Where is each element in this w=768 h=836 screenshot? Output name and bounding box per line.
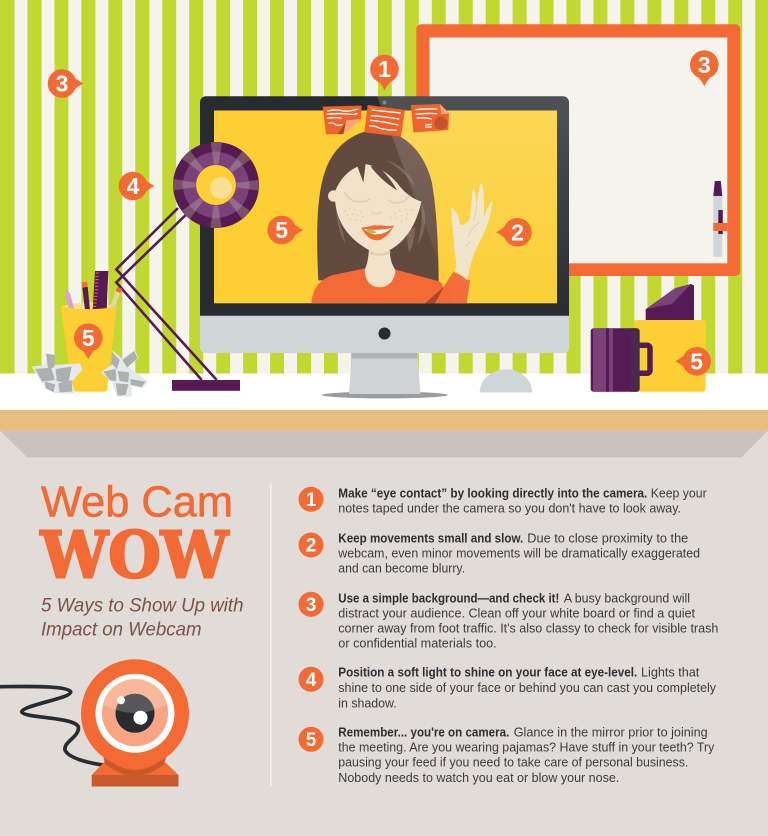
tip 5 text bbox=[338, 725, 715, 785]
tip 4 text: shine to one side of your face or behind you can cast you completely bbox=[338, 680, 717, 695]
tip 3 text: Use a simple background—and check it! bbox=[338, 590, 559, 605]
callout pin 5 on cup: 5 bbox=[82, 325, 95, 351]
tip 5 text: Nobody needs to watch you eat or blow your nose. bbox=[338, 770, 619, 785]
monitor bbox=[200, 96, 569, 353]
subtitle: Impact on Webcam bbox=[41, 620, 202, 641]
callout pin 3 on whiteboard bbox=[690, 50, 719, 86]
number badge 4 bbox=[298, 667, 324, 692]
raised arm sleeve bbox=[433, 272, 470, 303]
computer mouse bbox=[480, 369, 532, 392]
tip 5 text: the meeting. Are you wearing pajamas? Have stuff in your teeth? Try bbox=[338, 740, 715, 755]
number badge 3 bbox=[298, 592, 324, 617]
webcam body bbox=[81, 659, 189, 767]
number badge 1: 1 bbox=[306, 490, 317, 511]
callout pin 5 on folder: 5 bbox=[690, 348, 703, 374]
tip 4 text: Lights that bbox=[641, 665, 700, 680]
tip 5 text: Remember... you're on camera. bbox=[338, 725, 509, 740]
tip 4 text bbox=[338, 665, 717, 710]
sticky notes bbox=[323, 104, 449, 137]
divider bbox=[270, 483, 272, 786]
sticky note left bbox=[323, 106, 362, 134]
tip 4 text: Position a soft light to shine on your face at eye-level. bbox=[338, 665, 637, 680]
tip 1 text bbox=[338, 485, 707, 516]
callout pin 3 on wall: 3 bbox=[56, 71, 68, 97]
nose bbox=[372, 212, 382, 214]
diagonal screen reflection bbox=[377, 96, 569, 268]
tip 2 bbox=[298, 530, 700, 576]
callout pin 2 at hand bbox=[496, 218, 532, 247]
crumpled paper right bbox=[101, 350, 148, 397]
monitor stand bbox=[322, 353, 448, 398]
callout pin 3 on whiteboard: 3 bbox=[698, 52, 711, 78]
marker on whiteboard bbox=[713, 181, 727, 257]
webcam lens bbox=[116, 694, 154, 733]
webcam cable bbox=[0, 686, 103, 765]
tip 5 bbox=[298, 725, 715, 785]
sticky note right bbox=[411, 104, 449, 132]
tip 3 bbox=[298, 590, 718, 651]
face bbox=[335, 164, 421, 252]
webcam stand bbox=[92, 760, 178, 775]
tip 2 text: Keep movements small and slow. bbox=[338, 530, 523, 545]
striped wallpaper bbox=[0, 0, 768, 374]
tip 3 text: A busy background will bbox=[564, 590, 690, 605]
pencils and ruler bbox=[65, 271, 123, 310]
number badge 3: 3 bbox=[306, 595, 316, 616]
callout pin 1 at camera: 1 bbox=[378, 56, 391, 82]
number badge 5: 5 bbox=[306, 730, 317, 751]
lamp head bbox=[173, 142, 259, 228]
tip 3 text: corner away from foot traffic. It's also classy to check for visible trash bbox=[338, 621, 718, 636]
screen bbox=[214, 110, 557, 303]
whiteboard bbox=[416, 24, 740, 276]
hair side strands bbox=[336, 203, 425, 252]
subtitle: 5 Ways to Show Up with bbox=[41, 596, 244, 617]
closed eyes bbox=[345, 193, 409, 203]
number badge 2: 2 bbox=[306, 536, 316, 557]
woman on screen bbox=[311, 130, 493, 303]
title line: WOW: WOW bbox=[40, 518, 230, 593]
callout pin 4 on lamp: 4 bbox=[127, 173, 140, 199]
desk bbox=[0, 374, 768, 457]
lamp base bbox=[172, 380, 240, 391]
number badge 1 bbox=[298, 487, 324, 512]
callout pin 5 on cup bbox=[74, 323, 103, 359]
chin shading bbox=[369, 250, 390, 256]
tip 1 bbox=[298, 485, 707, 516]
callout pin 2 at hand: 2 bbox=[511, 220, 524, 246]
yellow folder bbox=[634, 320, 706, 392]
tip 5 text: pausing your feed if you need to take care of personal business. bbox=[338, 755, 688, 770]
number badge 4: 4 bbox=[306, 670, 317, 691]
icon: webcam bbox=[0, 659, 189, 786]
callout pin 1 at camera bbox=[370, 55, 399, 90]
webcam lens on monitor bbox=[382, 100, 386, 104]
freckles bbox=[344, 207, 413, 222]
mouth with spinach in teeth bbox=[361, 225, 394, 240]
tip 3 text: distract your audience. Clean off your white board or find a quiet bbox=[338, 605, 695, 620]
lamp arms bbox=[116, 208, 217, 380]
tip 2 text: and can become blurry. bbox=[338, 561, 465, 576]
title bbox=[40, 478, 233, 593]
tip 1 text: notes taped under the camera so you don't have to look away. bbox=[338, 501, 681, 516]
lower text panel background bbox=[0, 431, 768, 836]
cup body bbox=[61, 307, 117, 392]
desk lamp bbox=[116, 142, 259, 391]
tip 4 text: in shadow. bbox=[338, 695, 397, 710]
number badge 5 bbox=[298, 727, 324, 752]
pencil cup bbox=[61, 271, 123, 392]
tip 3 text bbox=[338, 590, 718, 651]
shirt bbox=[311, 268, 443, 303]
tip 4 bbox=[298, 665, 717, 710]
cup inner back bbox=[61, 302, 117, 309]
tip 1 text: Make “eye contact” by looking directly into the camera. bbox=[338, 485, 647, 500]
crumpled paper left bbox=[32, 353, 82, 393]
hair bbox=[317, 130, 439, 282]
subtitle bbox=[41, 596, 244, 641]
number badge 2 bbox=[298, 532, 324, 558]
callout pin 5 on screen bbox=[267, 216, 303, 244]
tip 2 text: Due to close proximity to the bbox=[527, 530, 688, 545]
callout pin 4 on lamp bbox=[119, 172, 154, 200]
sticky note middle bbox=[364, 105, 405, 137]
mug bbox=[591, 328, 650, 392]
tip 1 text: Keep your bbox=[651, 485, 707, 500]
bangs bbox=[357, 163, 397, 190]
book in folder bbox=[646, 284, 694, 320]
callout pin 3 on wall bbox=[48, 69, 84, 98]
neck bbox=[364, 248, 396, 287]
title line: Web Cam: Web Cam bbox=[41, 478, 233, 527]
tip 2 text bbox=[337, 530, 700, 576]
tip 5 text: Glance in the mirror prior to joining bbox=[514, 725, 708, 740]
monitor button bbox=[378, 328, 390, 340]
ear bbox=[328, 190, 339, 202]
callout pin 5 on folder bbox=[675, 347, 711, 376]
callout pin 5 on screen: 5 bbox=[275, 217, 288, 243]
coffee mug and folder bbox=[591, 284, 706, 392]
tip 2 text: webcam, even minor movements will be dramatically exaggerated bbox=[337, 545, 700, 560]
tip 3 text: or confidential materials too. bbox=[338, 636, 497, 651]
hand bbox=[451, 183, 493, 280]
